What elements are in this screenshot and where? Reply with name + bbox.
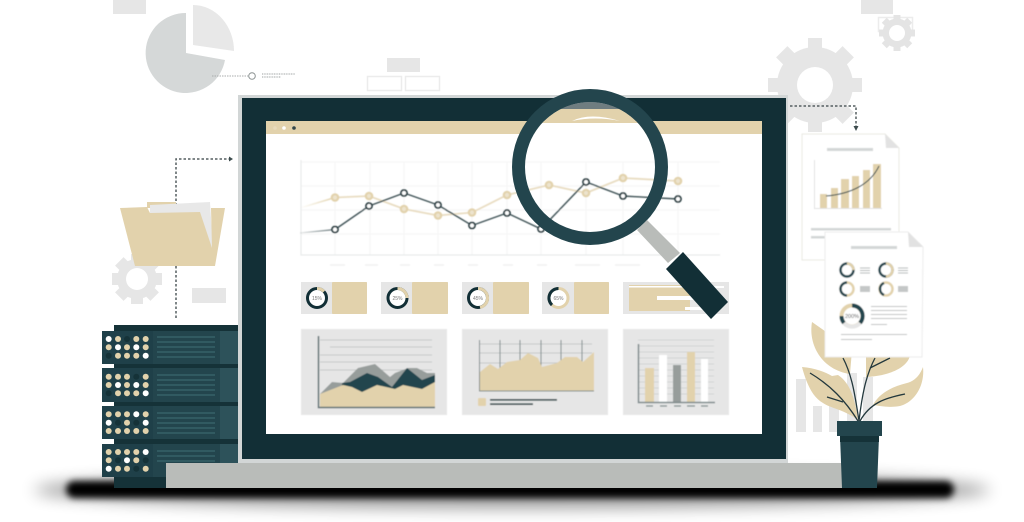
decorative boxes [368, 58, 440, 90]
server unit 3 [102, 406, 238, 439]
KPI card 1: 15% [312, 296, 323, 302]
plant pot [837, 421, 882, 488]
KPI card 2: 25% [392, 296, 403, 302]
panel: bar chart [623, 329, 729, 415]
document: donut report [825, 232, 923, 357]
KPI card 3: 45% [473, 296, 484, 302]
ground shadow [34, 472, 990, 508]
icon: large gear [768, 38, 862, 132]
monitor [238, 95, 788, 463]
server unit 1 [102, 331, 238, 364]
background bars behind plant [796, 373, 873, 432]
server rack [102, 325, 240, 488]
server unit 2 [102, 368, 238, 402]
plant [802, 322, 923, 488]
panel: area chart [301, 329, 447, 415]
monitor base [166, 463, 842, 488]
server unit 4 [102, 444, 238, 477]
KPI card 4 [542, 282, 609, 314]
document: donut report: 200% [845, 314, 859, 320]
magnifying glass [518, 96, 728, 319]
dark data series [300, 179, 681, 233]
KPI card 3 [462, 282, 529, 314]
KPI card 2 [381, 282, 448, 314]
KPI card 4: 65% [553, 296, 564, 302]
document: growth report [802, 134, 899, 260]
icon: small gear top right [861, 0, 915, 51]
panel: area chart with legend [462, 329, 608, 415]
window title bar [266, 121, 762, 134]
legend [478, 398, 557, 406]
decorative box left [192, 288, 226, 303]
icon: folder [120, 202, 225, 266]
magnifier lens interior [534, 102, 646, 134]
KPI card 5: bars [623, 282, 729, 314]
icon: small gear left [112, 254, 162, 304]
KPI card 1 [301, 282, 367, 314]
arrow: gear to document [790, 106, 858, 131]
line chart [300, 160, 720, 265]
arrow: folder to monitor [176, 156, 233, 318]
beige data series [300, 175, 681, 219]
pie chart decoration [113, 0, 295, 93]
